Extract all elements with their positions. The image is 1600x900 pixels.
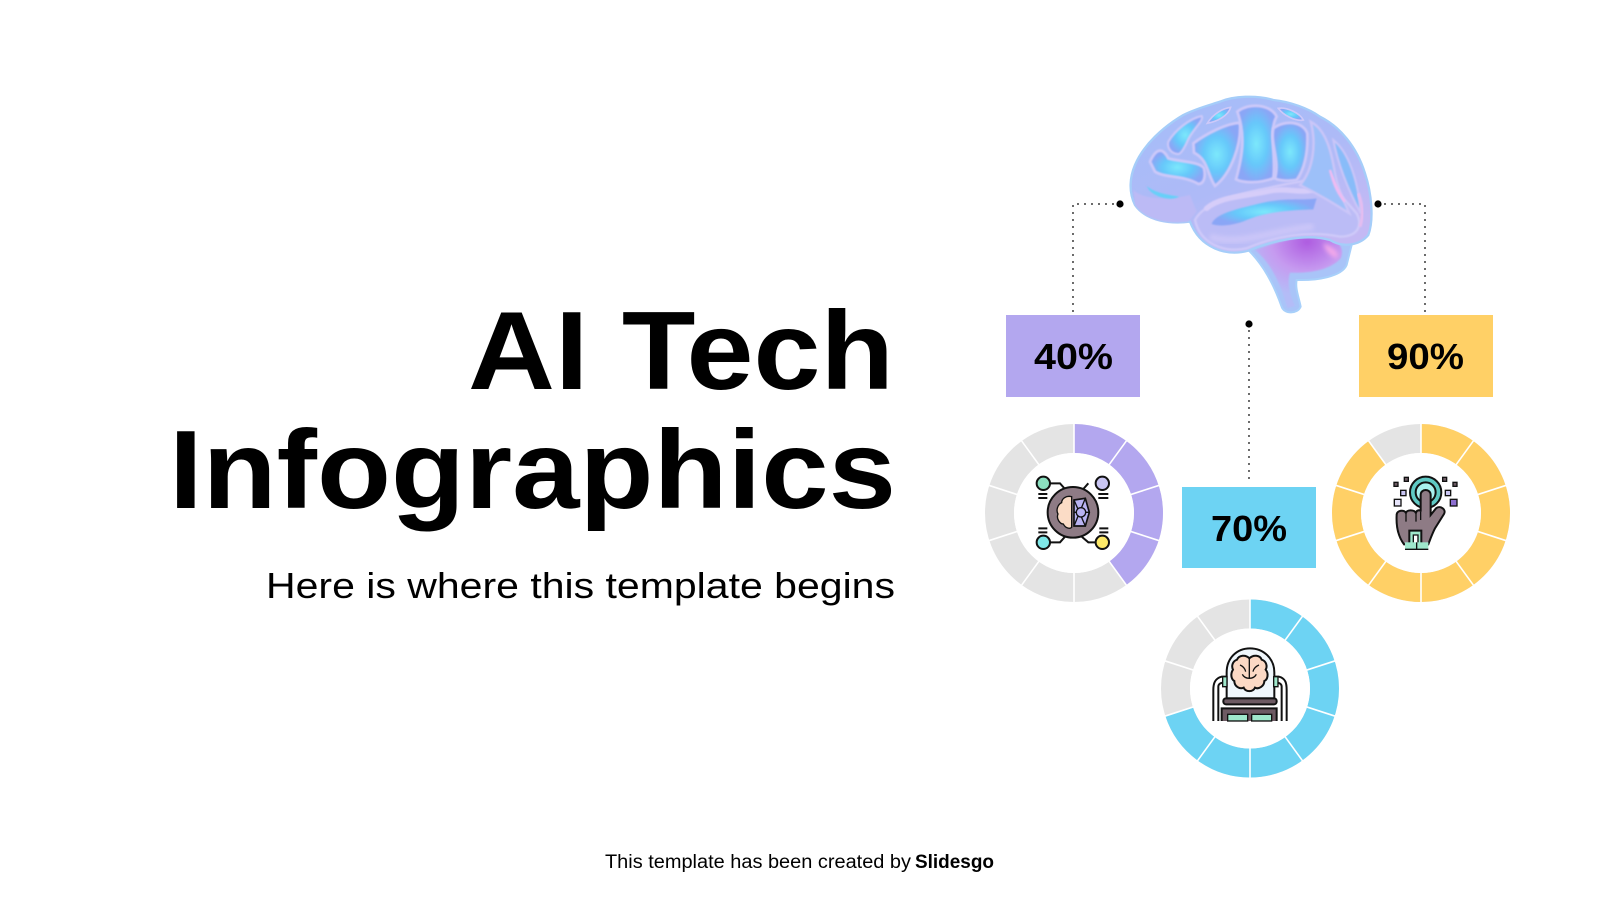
label box: 40%: 40% — [1034, 336, 1113, 377]
connector: brain to 70% — [1245, 320, 1253, 484]
illustration: iridescent brain — [1131, 97, 1372, 312]
label box: 90%: 90% — [1387, 336, 1464, 377]
footer credit: Slidesgo — [915, 852, 994, 873]
icon: brain network — [1037, 477, 1109, 549]
title: Infographics — [169, 408, 896, 532]
donut chart: 40% — [988, 423, 1160, 603]
connector: brain to 90% — [1374, 200, 1425, 313]
title — [169, 289, 896, 532]
donut chart: 70% — [1164, 598, 1336, 778]
footer credit: This template has been created by — [605, 852, 912, 873]
title: AI Tech — [468, 289, 894, 413]
label box: 70%: 70% — [1211, 508, 1287, 549]
icon: hand touching digital button — [1394, 477, 1457, 549]
subtitle: Here is where this template begins — [266, 565, 895, 606]
donut chart: 90% — [1335, 423, 1507, 603]
connector: brain to 40% — [1073, 200, 1124, 313]
label box: 70% — [1182, 487, 1316, 568]
label box: 40% — [1006, 315, 1140, 397]
icon: brain in a glass dome — [1213, 648, 1287, 721]
label box: 90% — [1359, 315, 1493, 397]
